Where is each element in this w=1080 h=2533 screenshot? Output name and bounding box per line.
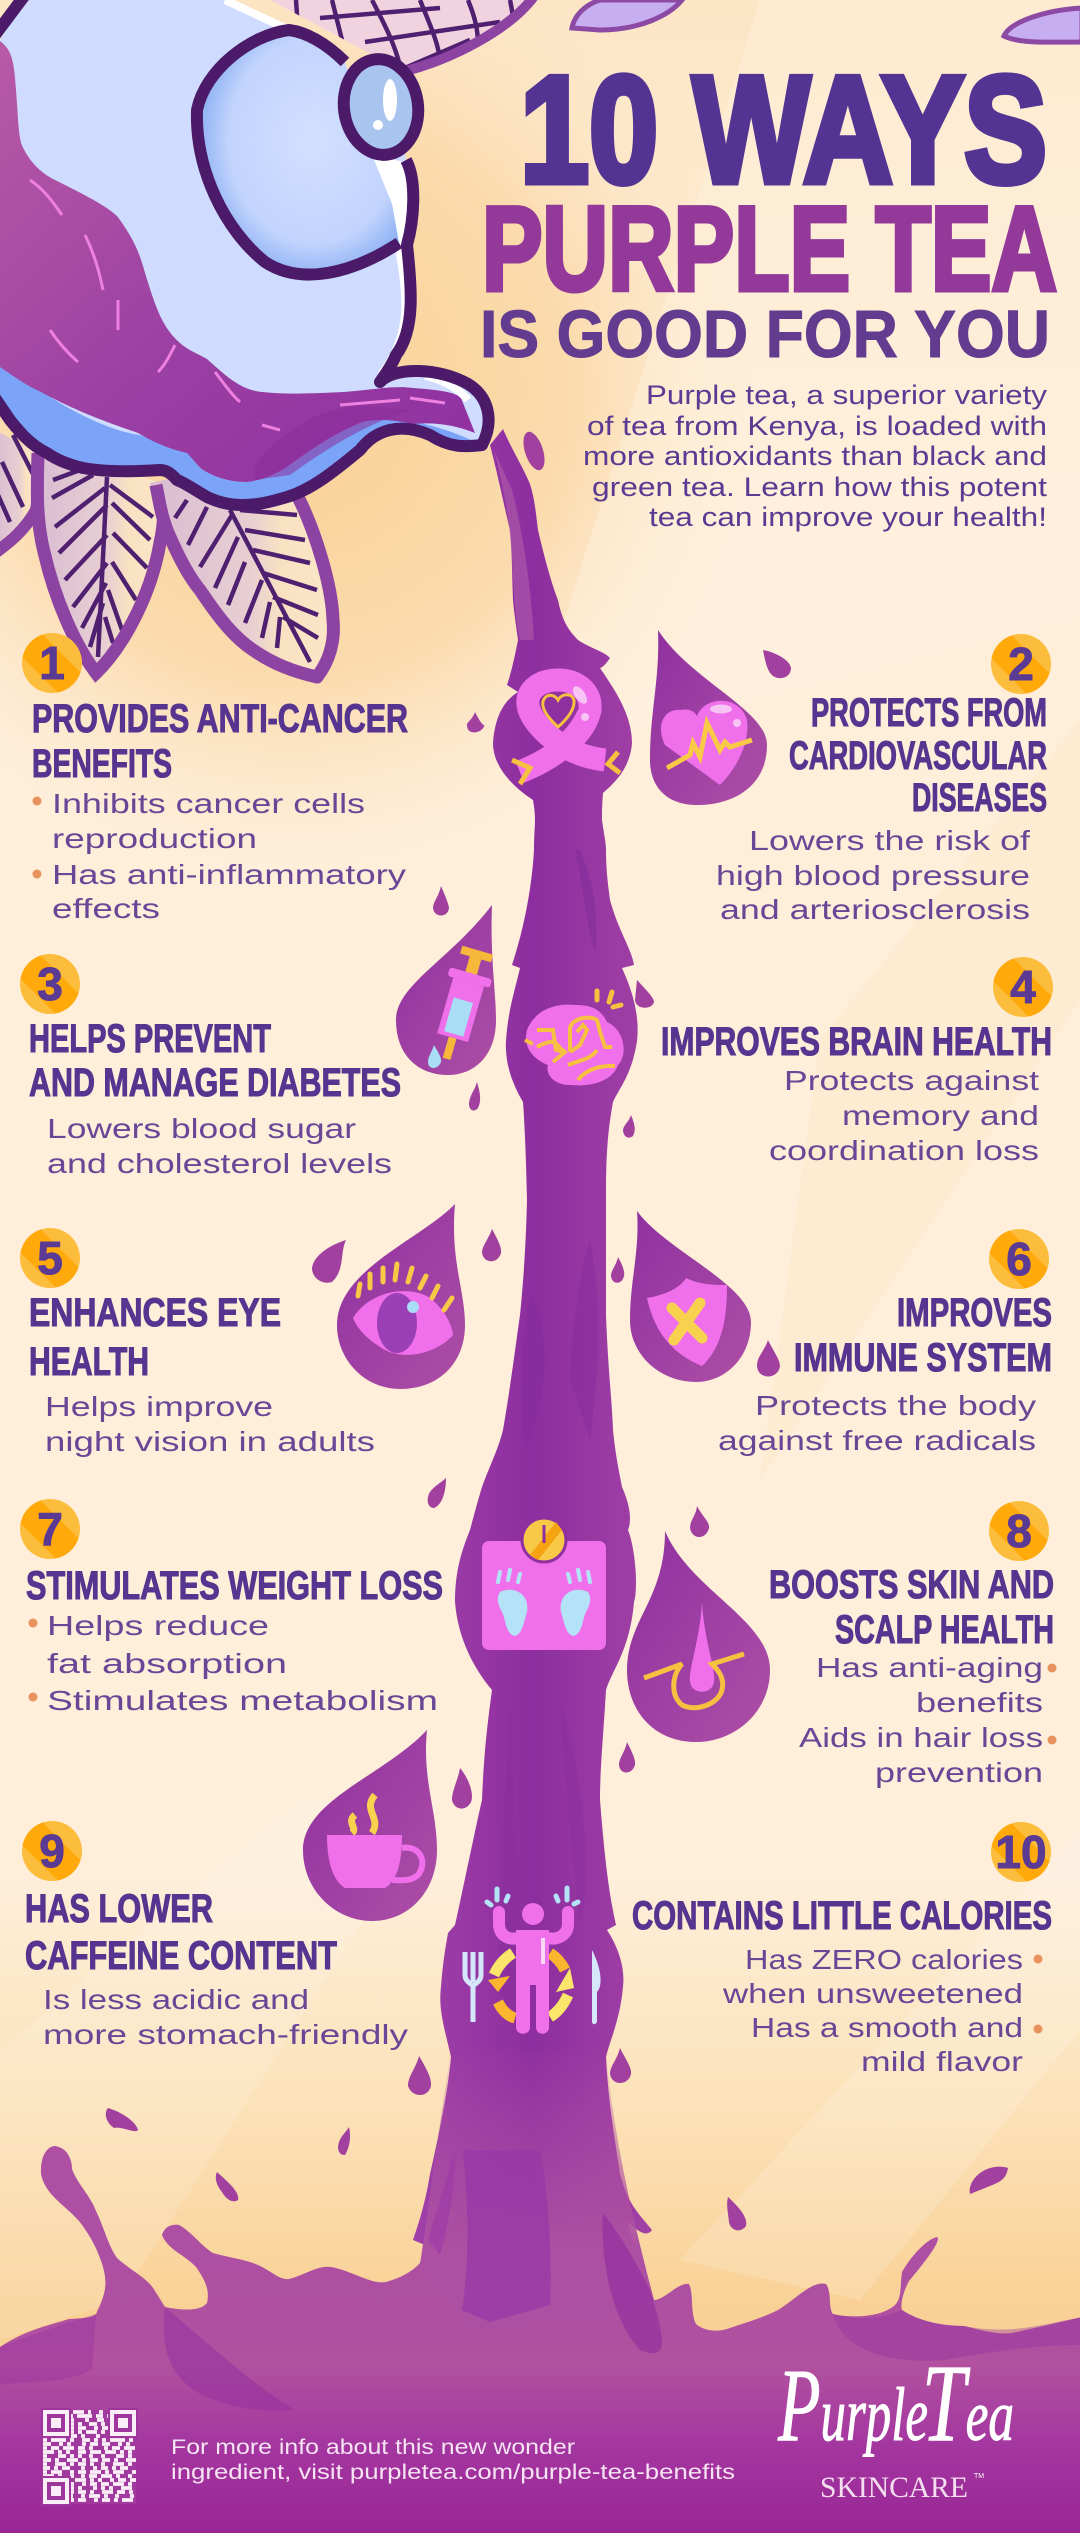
icon: cycle arrows: [488, 1953, 574, 2018]
body 1: reproduction: [52, 823, 257, 854]
body 7: [28, 1610, 438, 1716]
body 9: more stomach-friendly: [43, 2019, 408, 2050]
body 2: high blood pressure: [716, 860, 1030, 891]
heading 2: [789, 691, 1047, 820]
body 3: Lowers blood sugar: [47, 1113, 356, 1144]
tea stream trunk: [413, 429, 662, 2353]
lid: [197, 30, 399, 275]
icon: cup: [327, 1835, 422, 1888]
body 10: mild flavor: [861, 2046, 1023, 2077]
body 8: [799, 1652, 1056, 1788]
heading 5: [29, 1291, 281, 1384]
icon: person with metabolism cycle: [465, 1888, 601, 2034]
icon: liquid drop: [428, 1045, 441, 1068]
body 3: and cholesterol levels: [47, 1148, 392, 1179]
badge 3: [20, 954, 80, 1014]
icon: person: [499, 1903, 568, 2034]
heading 1: [32, 697, 408, 786]
icon: eye: [353, 1264, 453, 1355]
footer text: [171, 2436, 735, 2484]
body 4: memory and: [842, 1100, 1039, 1131]
body 8: Has anti-aging: [816, 1652, 1043, 1683]
body 1: effects: [52, 893, 160, 924]
item 10: [632, 1822, 1052, 2077]
title: [480, 45, 1057, 372]
body 6: Protects the body: [755, 1390, 1036, 1421]
body 8: benefits: [916, 1687, 1043, 1718]
badge 5: [20, 1228, 80, 1288]
badge 2: 2: [1008, 638, 1034, 690]
item 8: [769, 1501, 1056, 1788]
tea inside pot: [0, 41, 475, 482]
body 5: Helps improve: [45, 1391, 273, 1422]
heading 5: ENHANCES EYE: [29, 1291, 281, 1335]
item 5: [20, 1228, 375, 1457]
heading 9: CAFFEINE CONTENT: [25, 1934, 337, 1978]
heading 6: [794, 1291, 1052, 1380]
drop: shield: [630, 1211, 751, 1382]
body 9: [43, 1984, 408, 2050]
badge 9: [22, 1821, 82, 1881]
heading 8: [769, 1563, 1054, 1652]
body 1: Inhibits cancer cells: [52, 788, 365, 819]
body 10: Has a smooth and: [751, 2012, 1023, 2043]
splash: [0, 2146, 1080, 2533]
icon: rays: [487, 1888, 578, 1905]
heading 7: STIMULATES WEIGHT LOSS: [26, 1564, 443, 1608]
drop: syringe: [396, 905, 499, 1075]
white rim: [372, 155, 411, 372]
heading 5: HEALTH: [29, 1340, 149, 1384]
badge 7: 7: [37, 1503, 63, 1555]
body 8: prevention: [875, 1757, 1043, 1788]
heading 3: HELPS PREVENT: [29, 1017, 271, 1061]
intro paragraph: tea can improve your health!: [649, 502, 1047, 532]
item 4: [661, 957, 1053, 1166]
badge 5: 5: [37, 1232, 63, 1284]
title line 3: IS GOOD FOR YOU: [480, 297, 1050, 372]
footer text: ingredient, visit purpletea.com/purple-tea-benefits: [171, 2461, 735, 2484]
icon: brain: [525, 991, 624, 1085]
small drops: [106, 429, 1008, 2230]
badge 6: [989, 1229, 1049, 1289]
icon: steam: [352, 1795, 375, 1833]
body 10: Has ZERO calories: [745, 1944, 1023, 1975]
badge 7: [20, 1499, 80, 1559]
pot lower blue: [0, 360, 482, 505]
icon: follicle: [644, 1602, 744, 1708]
intro paragraph: more antioxidants than black and: [583, 441, 1047, 471]
body 10: when unsweetened: [722, 1978, 1023, 2009]
small leaf top right: [1004, 8, 1080, 42]
logo skincare: SKINCARE: [820, 2471, 968, 2504]
badge 8: 8: [1006, 1505, 1032, 1557]
body 4: coordination loss: [769, 1135, 1039, 1166]
heading 3: AND MANAGE DIABETES: [29, 1061, 401, 1105]
item 3: [20, 954, 401, 1179]
badge 4: [993, 957, 1053, 1017]
icon: knife: [592, 1950, 601, 2024]
body 5: night vision in adults: [45, 1426, 375, 1457]
teapot: [0, 0, 489, 505]
QR code: [41, 2408, 138, 2506]
icon: ribbon: [512, 680, 620, 784]
leaf left: [0, 430, 38, 553]
leaf centre: [37, 453, 164, 673]
badge 4: 4: [1010, 961, 1036, 1013]
icon: heart: [661, 701, 752, 785]
pot outline: [0, 0, 489, 505]
heading 1: BENEFITS: [32, 742, 172, 786]
badge 9: 9: [39, 1825, 65, 1877]
intro paragraph: Purple tea, a superior variety: [646, 380, 1048, 410]
drop: heart: [650, 630, 767, 805]
icon: syringe: [425, 944, 499, 1065]
heading 9: [25, 1887, 337, 1978]
body 3: [47, 1113, 392, 1179]
body 9: Is less acidic and: [43, 1984, 309, 2015]
heading 9: HAS LOWER: [25, 1887, 213, 1931]
item 1: [22, 633, 408, 924]
body 7: fat absorption: [47, 1648, 287, 1679]
badge 8: [989, 1501, 1049, 1561]
item 9: [22, 1821, 408, 2050]
body 2: and arteriosclerosis: [720, 894, 1030, 925]
pot body: [0, 0, 489, 505]
body 2: [716, 825, 1030, 925]
icon: shield: [647, 1278, 727, 1366]
badge 3: 3: [37, 958, 63, 1010]
small leaf top centre: [572, 0, 682, 30]
badge 1: 1: [39, 637, 65, 689]
icon: fork: [465, 1952, 481, 2022]
badge 10: 10: [995, 1826, 1047, 1878]
body 4: [769, 1065, 1039, 1166]
lid outline: [197, 30, 399, 275]
intro paragraph: green tea. Learn how this potent: [592, 472, 1048, 502]
item 6: [718, 1229, 1052, 1456]
body 2: Lowers the risk of: [749, 825, 1030, 856]
intro paragraph: [583, 380, 1048, 532]
badge 1: [22, 633, 82, 693]
intro paragraph: of tea from Kenya, is loaded with: [587, 411, 1047, 441]
body 6: against free radicals: [718, 1425, 1036, 1456]
logo: [777, 2342, 1014, 2504]
body 1: Has anti-inflammatory: [52, 859, 406, 890]
logo script: Tea: [922, 2342, 1014, 2464]
trademark: TM: [974, 2473, 984, 2480]
drop: eye: [337, 1204, 465, 1389]
badge 2: [991, 634, 1051, 694]
bottom leaves: [0, 430, 333, 677]
body 7: Stimulates metabolism: [47, 1685, 438, 1716]
icon: weight scale: [482, 1518, 606, 1650]
drop: hair follicle: [627, 1531, 770, 1742]
top leaves: [270, 0, 535, 72]
body 5: [45, 1391, 375, 1457]
badge 6: 6: [1006, 1233, 1032, 1285]
item 7: [20, 1499, 443, 1716]
leaf right: [150, 470, 333, 677]
item 2: [716, 634, 1051, 925]
footer text: For more info about this new wonder: [171, 2436, 575, 2459]
body 8: Aids in hair loss: [799, 1722, 1043, 1753]
drop: cup: [303, 1730, 437, 1921]
heading 3: [29, 1017, 401, 1105]
body 4: Protects against: [784, 1065, 1039, 1096]
body 1: [32, 788, 406, 924]
body 10: [722, 1944, 1042, 2077]
body 6: [718, 1390, 1036, 1456]
lid knob: [338, 54, 424, 160]
heading 1: PROVIDES ANTI-CANCER: [32, 697, 408, 741]
logo script: Purple: [777, 2348, 928, 2463]
body 7: Helps reduce: [47, 1610, 269, 1641]
